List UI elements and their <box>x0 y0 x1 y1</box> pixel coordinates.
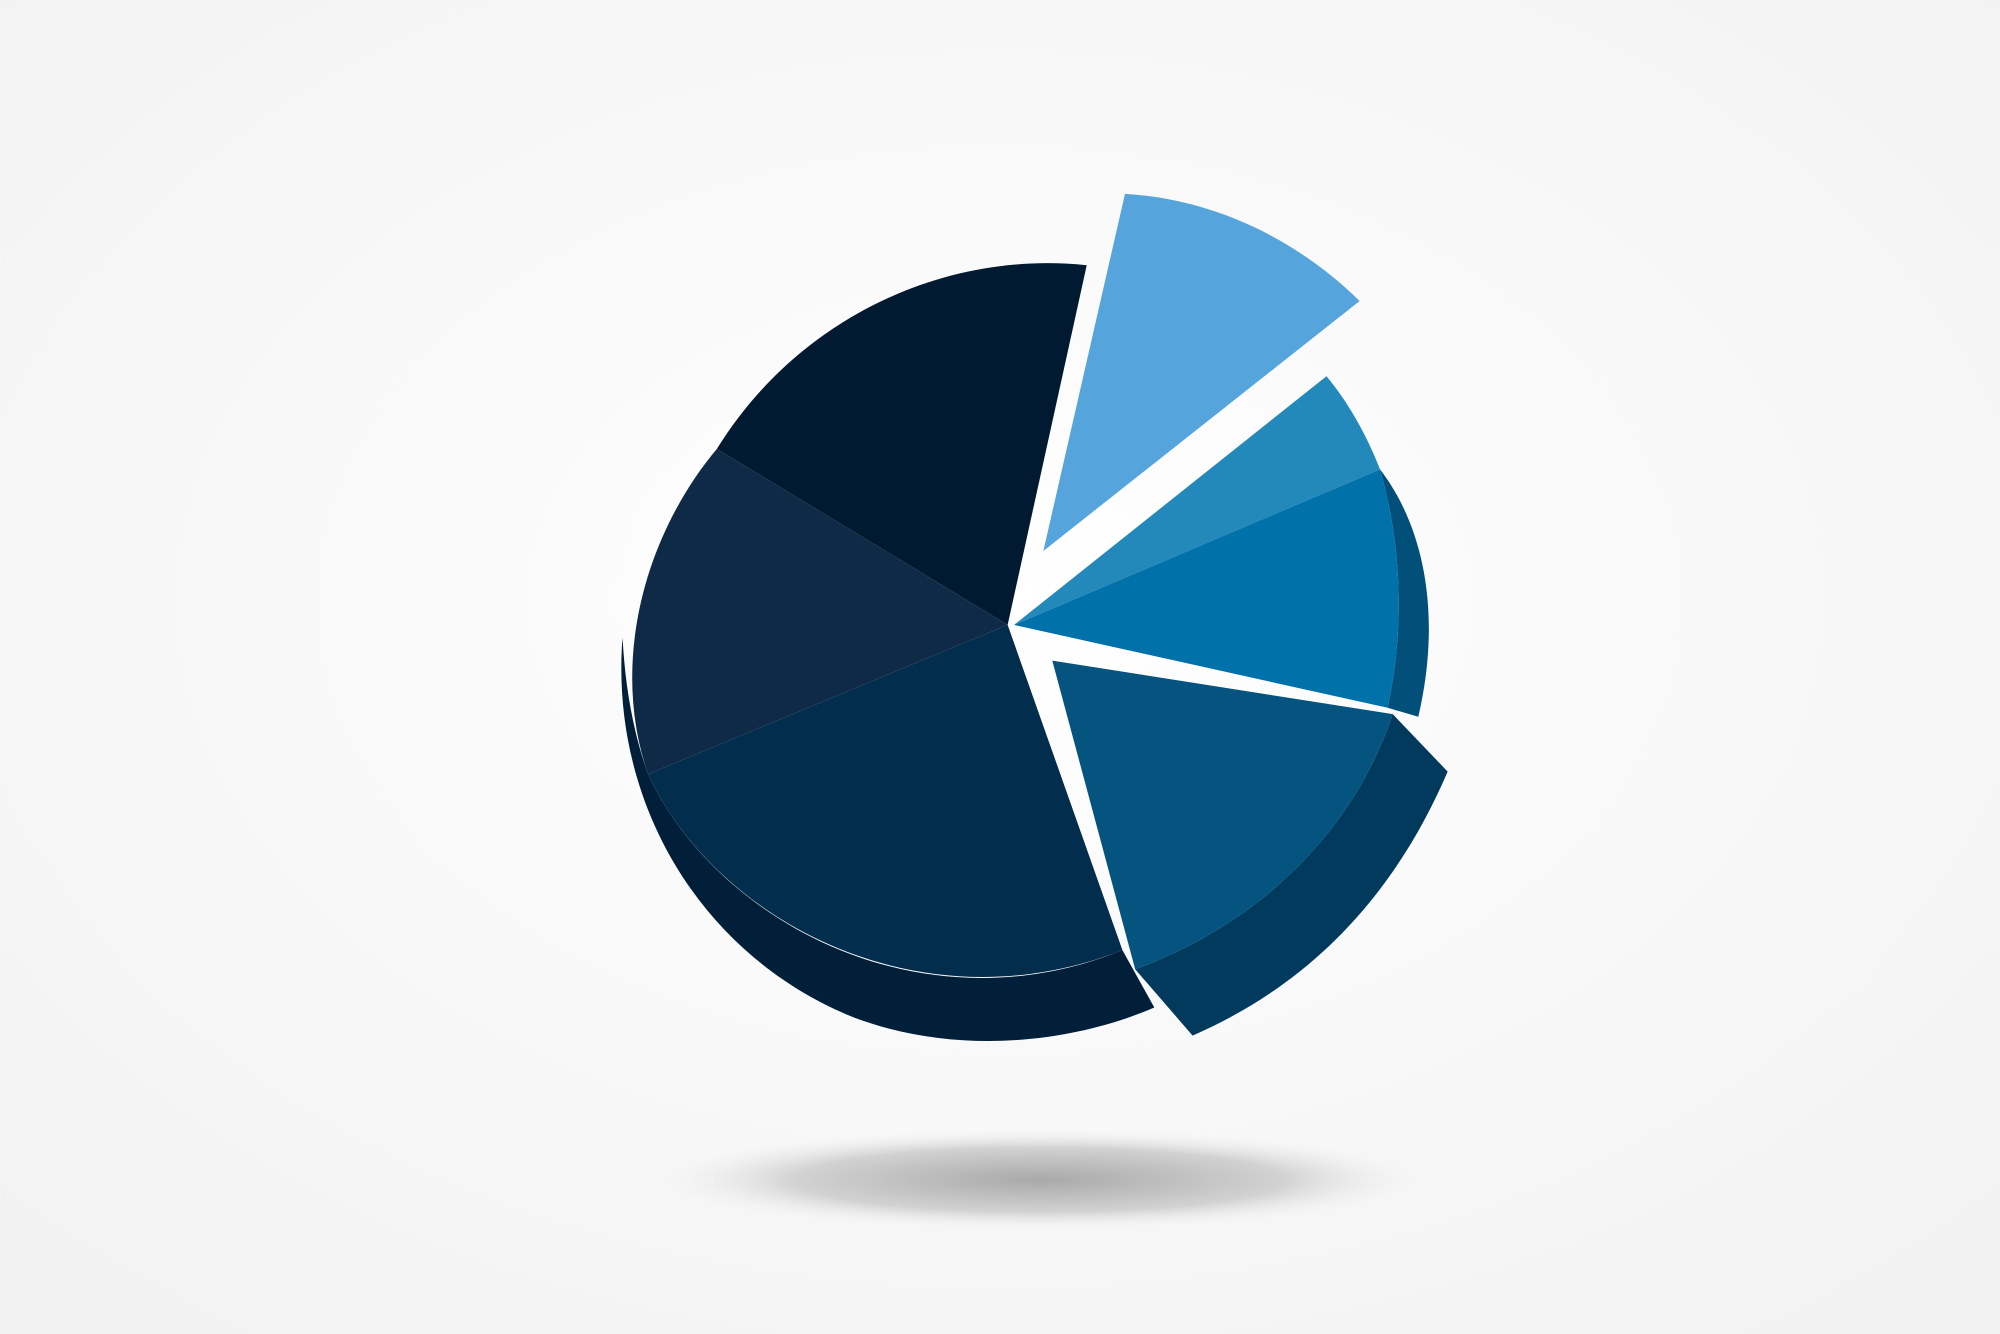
slice: blue <box>1014 469 1399 708</box>
pie: lower right exploded slice <box>1052 661 1448 1036</box>
side of lower right slice <box>1135 714 1448 1036</box>
shadow <box>631 1126 1448 1233</box>
slice: left <box>632 449 1008 774</box>
pie: light blue exploded slice <box>1043 194 1360 551</box>
pie: main body (left group) <box>621 263 1154 1041</box>
top face of lower right slice <box>1052 661 1393 969</box>
pie: right group <box>1014 376 1429 717</box>
slice: medium blue <box>1014 376 1380 625</box>
side of blue slice <box>1380 469 1429 717</box>
extrusion of main body <box>621 638 1154 1041</box>
slice: bottom <box>648 625 1122 977</box>
slice: top-left darkest <box>717 263 1087 625</box>
